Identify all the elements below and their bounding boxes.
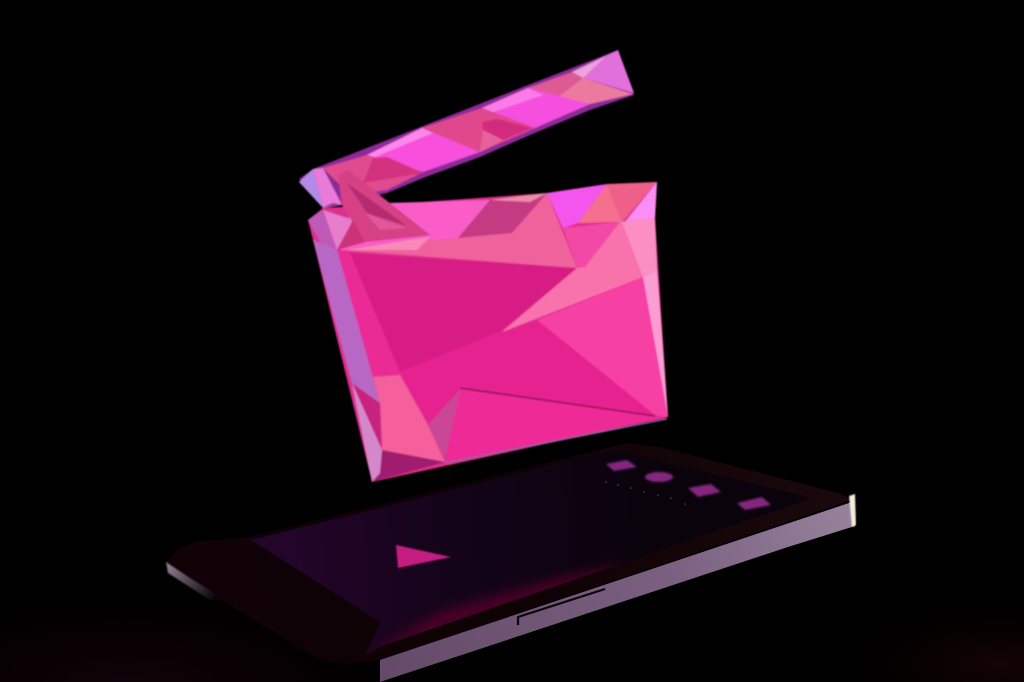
phone body frame [166,443,852,664]
clapper main face [313,240,668,482]
facet: right edge light [643,270,668,417]
phone screen [251,450,812,655]
clapper body [308,182,668,482]
arm end cap [313,168,342,208]
facet: centre magenta [400,320,655,425]
page indicator dots [605,481,686,505]
clapperboard [299,50,668,482]
phone home button slot [518,589,605,625]
facet: lilac left side [313,240,380,403]
facet: small magenta [352,383,382,450]
facet: lower-left lilac [352,383,382,482]
screen pink reflection [368,566,625,655]
phone corner highlight [849,494,856,527]
facet: dark magenta [350,253,577,372]
facet: bottom magenta [445,390,667,462]
facet: left strip [337,250,400,377]
icon: play triangle [396,545,451,568]
phone left edge [166,562,225,600]
facet: right pink [537,277,668,417]
app icons [606,460,771,510]
facet: slate wedge [428,390,460,460]
facet: dark plum bottom [372,450,445,482]
phone silver side edge [380,502,855,682]
clapper hinge [337,170,430,250]
smartphone [166,443,856,682]
clapper arm [299,50,634,208]
bottom edge [445,419,667,463]
slit line [460,388,655,416]
facet: lower-left light pink [373,375,445,462]
